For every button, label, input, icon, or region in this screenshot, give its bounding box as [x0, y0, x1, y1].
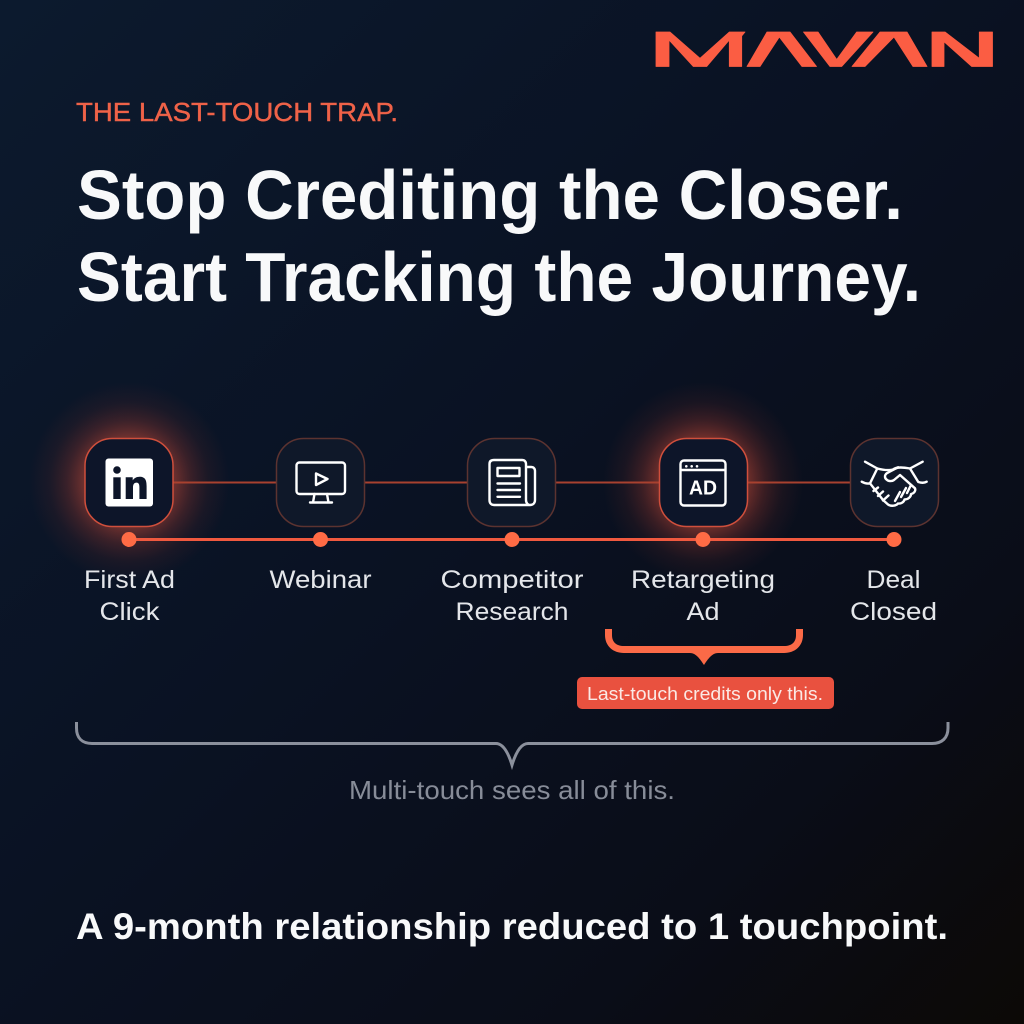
caption: multi-touch sees all of this: Multi-touch sees all of this. [349, 775, 675, 805]
orange bracket: last-touch [605, 629, 803, 665]
journey timeline [29, 382, 938, 626]
icon card: webinar monitor [276, 438, 364, 526]
eyebrow: the last-touch trap: THE LAST-TOUCH TRAP. [76, 97, 398, 127]
callout: last-touch credits only this [577, 677, 834, 709]
stage labels: Research [456, 598, 568, 626]
grey bracket: multi-touch [76, 722, 948, 765]
icon card: LinkedIn [85, 438, 173, 526]
stage labels: Ad [686, 598, 720, 626]
icon card: retargeting ad [660, 438, 748, 526]
stage labels: Click [100, 598, 160, 626]
stage labels: Competitor [440, 566, 584, 594]
icon card: deal closed handshake [850, 438, 938, 526]
bottom statement: A 9-month relationship reduced to 1 touchpoint. [76, 906, 948, 947]
headline [77, 156, 921, 316]
callout: last-touch credits only this: Last-touch credits only this. [587, 683, 823, 704]
timeline rail with dots [122, 532, 902, 547]
icon card: retargeting ad: AD [689, 478, 717, 500]
logo: MAVAN [656, 32, 992, 66]
icon card: competitor research newspaper [468, 438, 556, 526]
connector line between icons [173, 482, 850, 484]
glow: retargeting ad [603, 382, 803, 582]
stage labels: Closed [850, 598, 937, 626]
headline: Start Tracking the Journey. [77, 238, 921, 316]
stage labels: Deal [866, 566, 920, 594]
headline: Stop Crediting the Closer. [77, 156, 903, 234]
stage labels: Webinar [270, 566, 372, 594]
stage labels [84, 566, 937, 626]
stage labels: First Ad [84, 566, 175, 594]
stage labels: Retargeting [631, 566, 775, 594]
glow: first ad click [29, 382, 229, 582]
